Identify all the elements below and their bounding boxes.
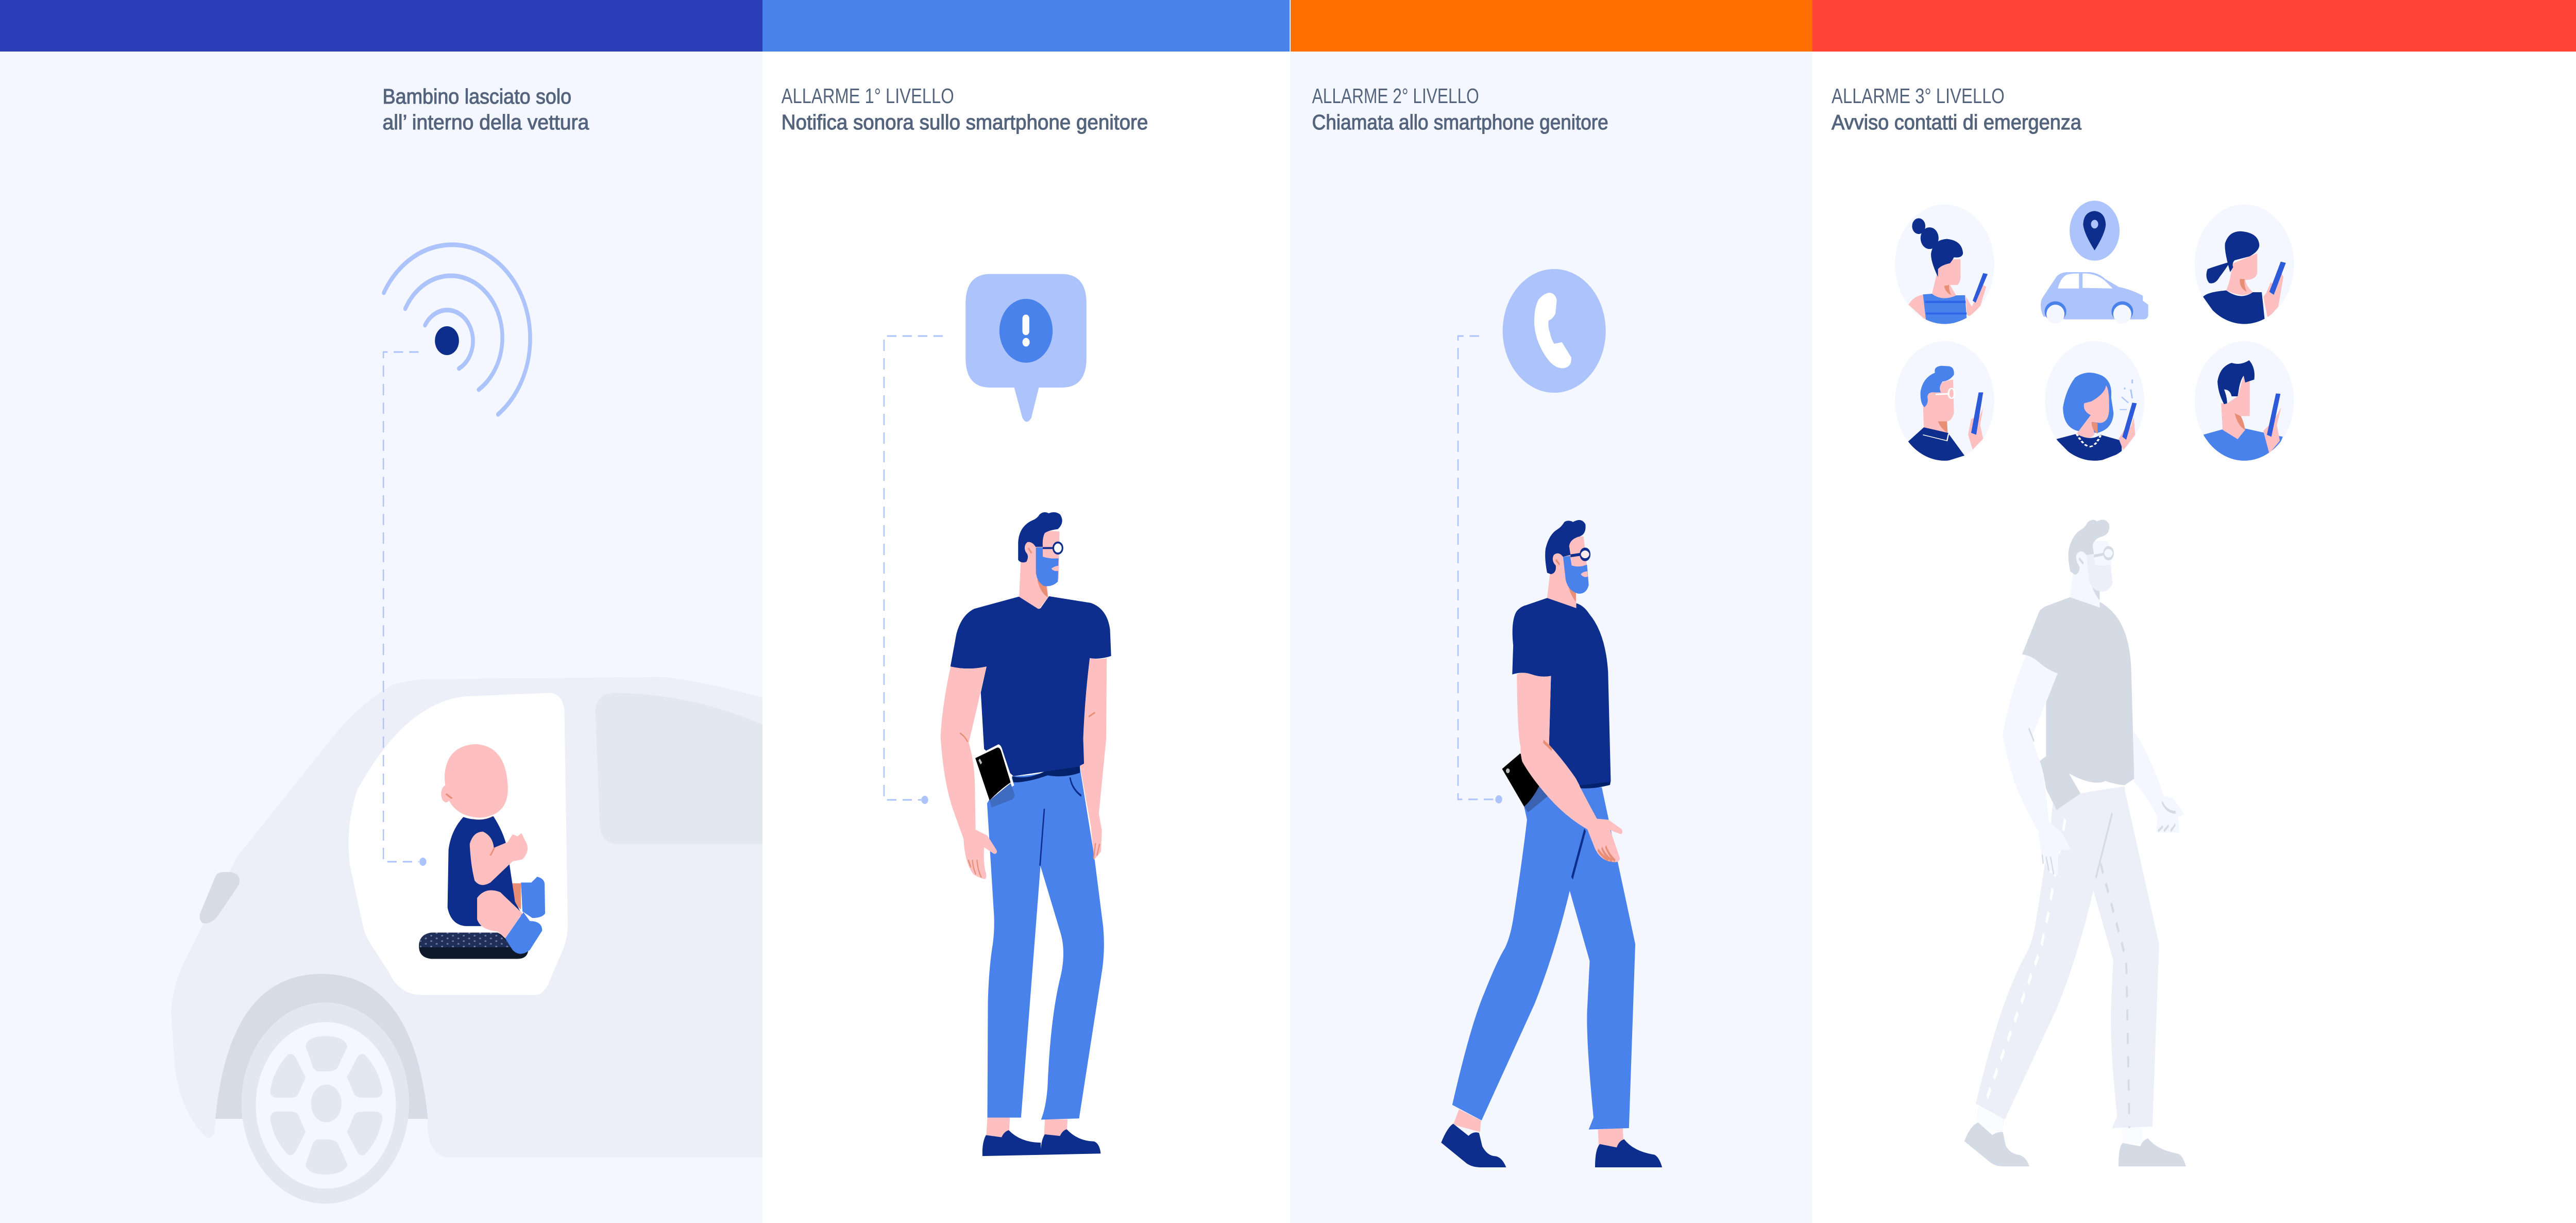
heading: allarme 3 livello: ALLARME 3° LIVELLO bbox=[1832, 84, 2005, 108]
wheel bbox=[242, 1002, 409, 1203]
panel: alarm level 3 bbox=[1812, 0, 2576, 1223]
cushion bbox=[419, 933, 529, 959]
heading: allarme 3 livello bbox=[1832, 84, 2081, 134]
icon: located car bbox=[2041, 272, 2148, 324]
contact: woman with bun bbox=[1895, 205, 1994, 326]
header bar: dark blue bbox=[0, 0, 762, 52]
contact: man with glasses bbox=[1895, 341, 1994, 462]
heading: allarme 1 livello: Notifica sonora sullo smartphone genitore bbox=[782, 110, 1148, 134]
connector: dashed line alert to phone bbox=[884, 336, 943, 804]
illustration: faded walking parent bbox=[1964, 520, 2186, 1166]
header bar: blue bbox=[762, 0, 1290, 52]
contact: woman with necklace bbox=[2045, 341, 2144, 462]
contact: man with blue shirt bbox=[2195, 341, 2294, 464]
phone in pocket bbox=[975, 744, 1015, 808]
heading: allarme 3 livello: Avviso contatti di emergenza bbox=[1832, 110, 2081, 134]
car body bbox=[171, 677, 762, 1158]
illustration: standing parent bbox=[941, 512, 1111, 1156]
connector: dashed line sensor to child bbox=[383, 352, 427, 866]
heading: allarme 2 livello bbox=[1312, 84, 1608, 134]
side mirror bbox=[200, 872, 240, 924]
heading: bambino lasciato solo: all’ interno della vettura bbox=[382, 110, 589, 134]
header bar: orange bbox=[1291, 0, 1812, 52]
rear window bbox=[596, 693, 762, 844]
contact: woman with ponytail bbox=[2195, 205, 2294, 326]
baby bbox=[441, 744, 545, 954]
heading: allarme 2 livello: ALLARME 2° LIVELLO bbox=[1312, 84, 1479, 108]
illustration: car with child bbox=[171, 677, 762, 1203]
car window with child bbox=[349, 693, 568, 995]
wheel arch bbox=[215, 974, 428, 1119]
icon: alert speech bubble bbox=[965, 274, 1087, 422]
heading: allarme 2 livello: Chiamata allo smartphone genitore bbox=[1312, 110, 1608, 134]
heading: bambino lasciato solo: Bambino lasciato solo bbox=[382, 85, 571, 108]
panel: alarm level 2 bbox=[1290, 0, 1812, 1223]
head bbox=[1545, 520, 1590, 594]
connector: dashed line call to phone bbox=[1458, 336, 1502, 803]
panel: child left alone bbox=[0, 0, 762, 1223]
icon: phone call bbox=[1503, 269, 1606, 393]
head bbox=[1018, 512, 1062, 610]
illustration: walking parent bbox=[1441, 520, 1662, 1167]
phone in pocket bbox=[1502, 753, 1549, 812]
icon: signal waves bbox=[384, 245, 530, 414]
heading: allarme 1 livello: ALLARME 1° LIVELLO bbox=[782, 84, 954, 108]
header bar: red bbox=[1812, 0, 2576, 52]
emergency contacts grid bbox=[1895, 200, 2294, 464]
body bbox=[941, 596, 1111, 1156]
icon: location pin bbox=[2070, 200, 2120, 261]
heading: allarme 1 livello bbox=[782, 84, 1148, 134]
panel: alarm level 1 bbox=[762, 0, 1290, 1223]
heading: bambino lasciato solo bbox=[382, 85, 589, 134]
